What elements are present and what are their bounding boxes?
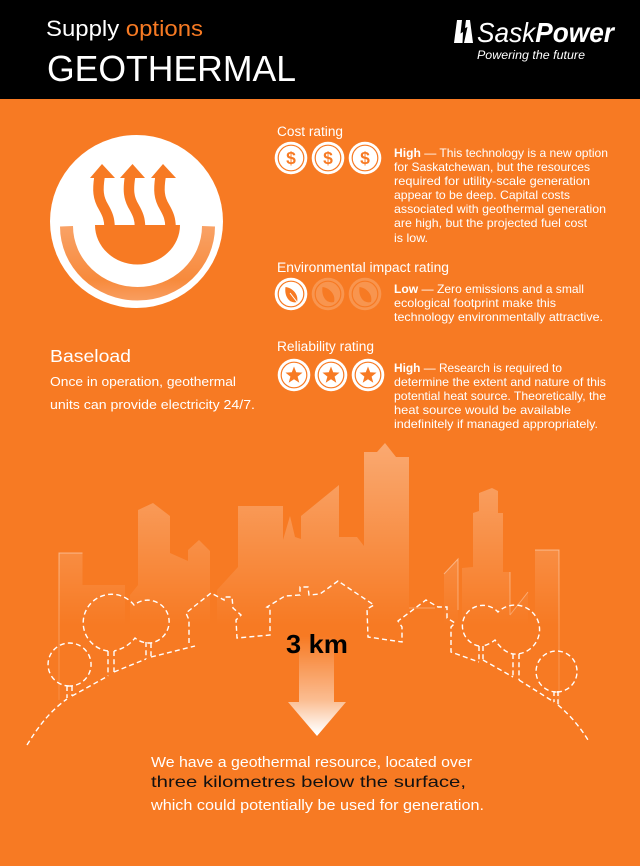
icon: heat bowl (95, 225, 180, 264)
icons: three dollar coins: $ (286, 148, 296, 168)
text: cost rating description (394, 146, 608, 245)
icon: underground band (60, 226, 215, 301)
bottom text block: which could potentially be used for generation. (150, 797, 484, 814)
icon: rising heat arrows (90, 164, 176, 227)
SaskPower logo (454, 17, 616, 62)
baseload text block (50, 346, 255, 412)
right trees (479, 646, 577, 705)
icons: three stars (278, 359, 384, 391)
text: environmental description: Low — Zero emissions and a small (394, 282, 584, 296)
text: environmental description (394, 282, 603, 324)
heading: cost rating: Cost rating (277, 124, 343, 139)
icon: geothermal heat (50, 135, 223, 308)
heading: supply options: Supply options (46, 16, 203, 41)
baseload text block: Baseload (50, 346, 131, 366)
text: reliability description: potential heat source. Theoretically, the (394, 389, 606, 403)
title: GEOTHERMAL (47, 48, 296, 89)
SaskPower logo: SaskPower (477, 17, 616, 48)
text: cost rating description: are high, but the projected fuel cost (394, 216, 588, 230)
panel: cost rating (275, 124, 608, 245)
bottom text block: We have a geothermal resource, located over (151, 754, 472, 771)
ground curve left (27, 699, 67, 745)
text: cost rating description: for Saskatchewan, but the resources (394, 160, 590, 174)
text: cost rating description: High — This technology is a new option (394, 146, 608, 160)
text: reliability description: High — Research is required to (394, 361, 562, 375)
text: reliability description: indefinitely if managed appropriately. (394, 417, 598, 431)
text: environmental description: technology environmentally attractive. (394, 310, 603, 324)
text: reliability description: determine the extent and nature of this (394, 375, 606, 389)
dashed houses, trees and ground (27, 581, 588, 745)
baseload text block: units can provide electricity 24/7. (50, 397, 255, 412)
icons: three dollar coins: $ (323, 148, 333, 168)
panel: environmental impact rating (275, 260, 603, 324)
text: environmental description: ecological footprint make this (394, 296, 556, 310)
heading: reliability rating: Reliability rating (277, 339, 374, 354)
ground and houses through centre (72, 581, 554, 702)
bottom text block (150, 754, 484, 814)
text: cost rating description: appear to be deep. Capital costs (394, 188, 570, 202)
icons: three dollar coins: $ (360, 148, 370, 168)
city skyline (59, 443, 559, 705)
bottom text block: three kilometres below the surface, (151, 774, 466, 791)
text: reliability description: heat source would be available (394, 403, 571, 417)
SaskPower logo: Powering the future (477, 48, 585, 62)
depth label: 3 km (286, 629, 348, 659)
heading: environmental impact rating: Environmental impact rating (277, 260, 449, 275)
ground curve right (558, 705, 588, 740)
text: cost rating description: required for utility-scale generation (394, 174, 590, 188)
baseload text block: Once in operation, geothermal (50, 374, 236, 389)
panel: reliability rating (277, 339, 606, 431)
left trees (48, 642, 151, 698)
text: reliability description (394, 361, 606, 431)
header band (0, 0, 640, 99)
icons: three dollar coins (275, 142, 381, 174)
text: cost rating description: associated with geothermal generation (394, 202, 606, 216)
arrow: downward (288, 636, 346, 736)
icons: three leaves, one active (275, 278, 381, 310)
text: cost rating description: is low. (394, 231, 428, 245)
